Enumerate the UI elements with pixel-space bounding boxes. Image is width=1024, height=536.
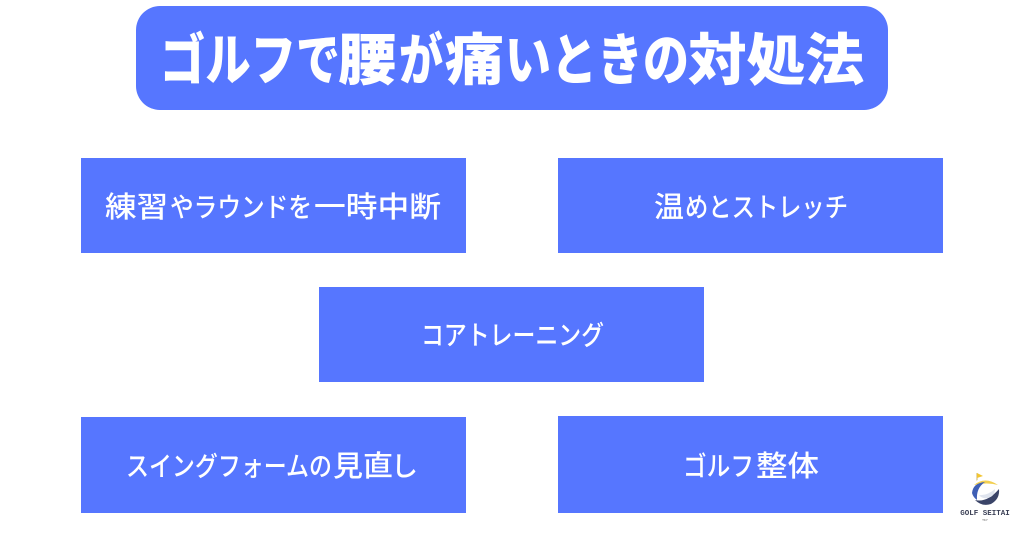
panel: pause practice: やラウンドを <box>170 193 312 223</box>
panel: swing form review: 見直 <box>333 450 393 483</box>
panel: swing form review <box>81 417 466 513</box>
title: 痛 <box>445 29 504 92</box>
icon: golf seitai logo <box>960 473 1010 522</box>
panel: golf seitai: ゴルフ <box>683 452 754 482</box>
title: 対処法 <box>688 29 864 92</box>
panel: golf seitai: 整体 <box>756 450 819 483</box>
panel: golf seitai <box>558 416 943 513</box>
panel: warming and stretching: 温 <box>654 192 684 224</box>
title: が <box>399 29 443 92</box>
panel: core training <box>319 287 704 382</box>
title <box>136 6 888 110</box>
panel: swing form review: し <box>391 452 418 482</box>
icon: golf seitai logo: GOLF SEITAI <box>960 510 1010 518</box>
panel: pause practice: 一時中断 <box>314 191 441 224</box>
panel: warming and stretching: めとストレッチ <box>685 193 848 223</box>
title: ゴルフ <box>160 29 296 92</box>
panel: warming and stretching <box>558 158 943 253</box>
panel: swing form review: スイングフォームの <box>126 452 332 482</box>
panel: pause practice: 練習 <box>105 191 168 224</box>
icon: golf seitai logo: TKY <box>982 518 988 522</box>
title: いときの <box>505 29 689 92</box>
title: 腰 <box>338 29 396 92</box>
title: で <box>296 29 340 92</box>
panel: pause practice <box>81 158 466 253</box>
panel: core training: コアトレーニング <box>421 321 604 351</box>
